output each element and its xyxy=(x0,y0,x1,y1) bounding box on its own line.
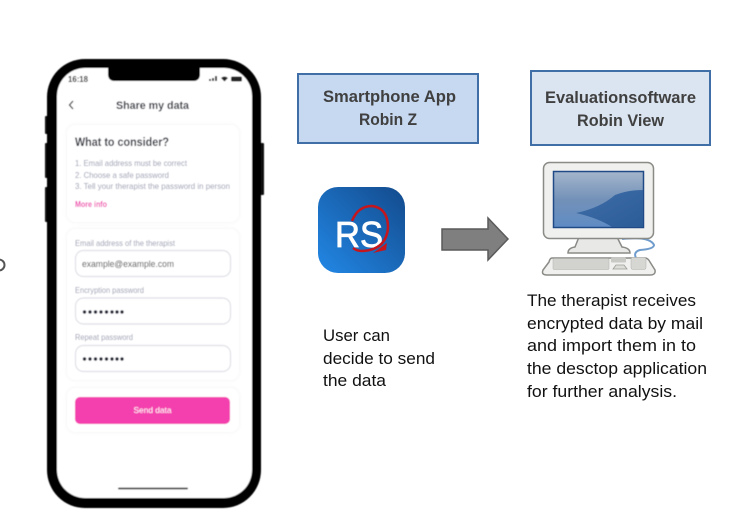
email value: example@example.com xyxy=(82,259,174,270)
status time: 16:18 xyxy=(68,74,88,84)
text: user can decide xyxy=(323,326,435,390)
email label: Email address of the therapist xyxy=(75,238,176,248)
arrow: app to desktop software xyxy=(442,218,508,260)
checklist: 2. Choose a safe password xyxy=(75,170,169,180)
heading box: Evaluationsoftware Robin View: Robin View xyxy=(577,111,665,130)
screen title: Share my data xyxy=(116,100,190,112)
phone body xyxy=(47,59,261,508)
arrow keys xyxy=(611,258,626,262)
text: therapist receives encrypted data: and import them in to xyxy=(527,336,696,355)
keyboard xyxy=(542,258,655,275)
checklist: 3. Tell your therapist the password in person xyxy=(75,181,230,191)
logo red tip xyxy=(373,243,387,253)
home indicator xyxy=(118,488,188,490)
back chevron xyxy=(70,101,73,109)
monitor stand xyxy=(568,237,630,253)
repeat field xyxy=(76,346,230,372)
text: therapist receives encrypted data: The therapist receives xyxy=(527,291,696,310)
text: therapist receives encrypted data: for further analysis. xyxy=(527,382,677,401)
text: therapist receives encrypted data xyxy=(527,291,707,401)
repeat dots xyxy=(83,357,124,361)
smartphone mockup: Share my data screen xyxy=(45,59,264,508)
icon: desktop computer xyxy=(542,162,655,275)
password dots xyxy=(83,310,124,314)
card heading: What to consider? xyxy=(75,135,169,149)
phone screen xyxy=(57,68,252,498)
logo red ring xyxy=(352,206,388,251)
text: user can decide: decide to send xyxy=(323,349,435,368)
card: send button xyxy=(67,388,239,432)
checklist: 1. Email address must be correct xyxy=(75,158,188,168)
screen highlight xyxy=(576,190,643,227)
heading box: Evaluationsoftware Robin View xyxy=(531,71,710,145)
cable xyxy=(622,238,654,258)
password field xyxy=(76,298,230,324)
send button xyxy=(75,397,230,424)
heading box: Smartphone App Robin Z xyxy=(298,74,478,143)
heading box: Smartphone App Robin Z: Robin Z xyxy=(359,110,417,129)
send label: Send data xyxy=(134,405,172,415)
password label: Encryption password xyxy=(75,285,144,295)
cropped ring at left edge xyxy=(0,260,4,270)
notch xyxy=(108,66,200,81)
logo letters: RS xyxy=(335,214,383,255)
text: therapist receives encrypted data: the desctop application xyxy=(527,359,707,378)
monitor screen xyxy=(554,172,644,228)
numeric pad xyxy=(631,258,646,270)
status icons xyxy=(209,76,242,82)
text: user can decide: the data xyxy=(323,371,387,390)
repeat label: Repeat password xyxy=(75,332,133,342)
keyboard keys xyxy=(553,258,609,270)
card: form xyxy=(67,229,239,380)
text: user can decide: User can xyxy=(323,326,390,345)
monitor body xyxy=(544,162,654,238)
text: therapist receives encrypted data: encrypted data by mail xyxy=(527,314,703,333)
heading box: Evaluationsoftware Robin View: Evaluationsoftware xyxy=(545,88,696,107)
email field xyxy=(76,250,230,276)
checklist xyxy=(75,158,230,191)
card: what to consider xyxy=(67,125,239,222)
more info link: More info xyxy=(75,200,107,209)
heading box: Smartphone App Robin Z: Smartphone App xyxy=(323,87,456,106)
icon: Robin Z app xyxy=(318,187,405,273)
mouse pad xyxy=(613,265,627,269)
phone side buttons xyxy=(45,116,264,222)
